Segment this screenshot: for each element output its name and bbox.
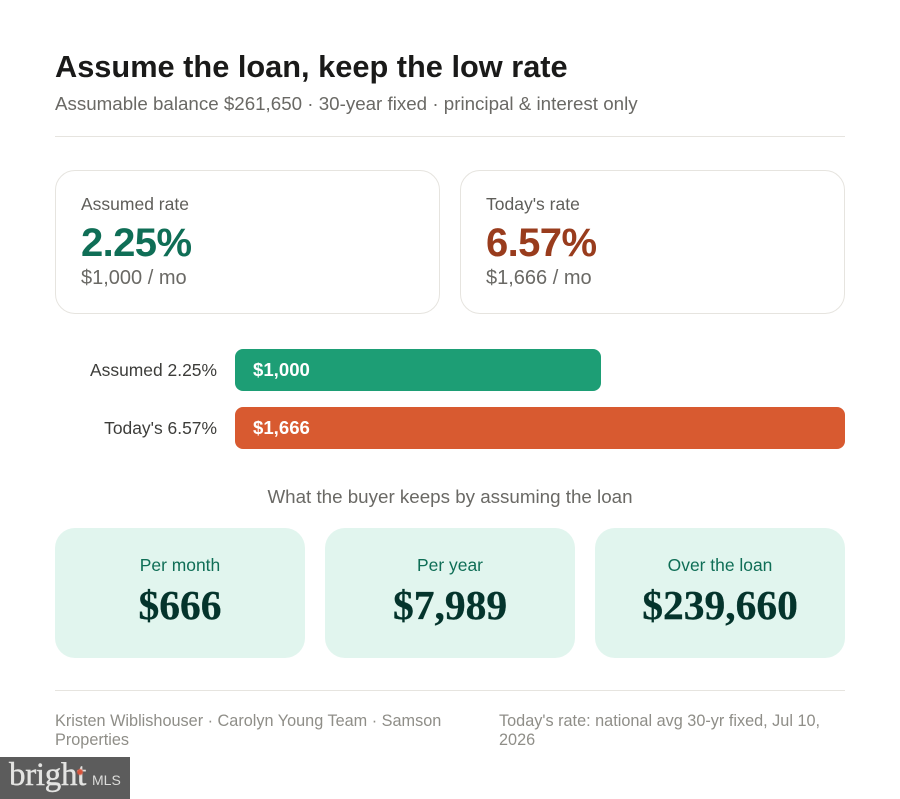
bar: today's $1,666 <box>235 407 845 449</box>
logo text: MLS: MLS <box>92 772 121 788</box>
bar: assumed $1,000: $1,000 <box>253 359 310 380</box>
bar label: today's: Today's 6.57% <box>104 418 217 438</box>
card payment: $1,000 / mo: $1,000 / mo <box>81 267 187 289</box>
bar: today's $1,666: $1,666 <box>253 417 310 438</box>
savings label: per year: Per year <box>417 555 483 575</box>
bar: assumed $1,000 <box>235 349 601 391</box>
panel: today's rate card <box>460 170 845 314</box>
logo accent: red dot <box>77 769 83 775</box>
card label: today's rate: Today's rate <box>486 194 580 214</box>
logo wordmark: bright: bright <box>9 757 86 793</box>
panel: savings per year <box>325 528 575 658</box>
panel: savings per month <box>55 528 305 658</box>
title: Assume the loan, keep the low rate <box>55 49 568 84</box>
logo: bright MLS watermark <box>0 757 130 799</box>
card value: 6.57%: 6.57% <box>486 221 596 265</box>
panel: savings over the loan <box>595 528 845 658</box>
savings value: $7,989: $7,989 <box>393 582 507 628</box>
savings value: $239,660: $239,660 <box>642 582 798 628</box>
savings label: per month: Per month <box>140 555 220 575</box>
card payment: $1,666 / mo: $1,666 / mo <box>486 267 592 289</box>
footer: rate source: Today's rate: national avg 30-yr fixed, Jul 10, 2026 <box>499 712 820 749</box>
footer: attribution: Kristen Wiblishouser · Carolyn Young Team · Samson Properties <box>55 712 441 749</box>
card value: 2.25%: 2.25% <box>81 221 191 265</box>
savings heading: What the buyer keeps by assuming the loan <box>267 486 633 507</box>
savings label: over the loan: Over the loan <box>668 555 772 575</box>
subtitle: Assumable balance $261,650 · 30-year fixed · principal & interest only <box>55 93 638 114</box>
bar label: assumed: Assumed 2.25% <box>90 360 217 380</box>
panel: assumed rate card <box>55 170 440 314</box>
card label: assumed rate: Assumed rate <box>81 194 189 214</box>
savings value: $666: $666 <box>138 582 222 628</box>
